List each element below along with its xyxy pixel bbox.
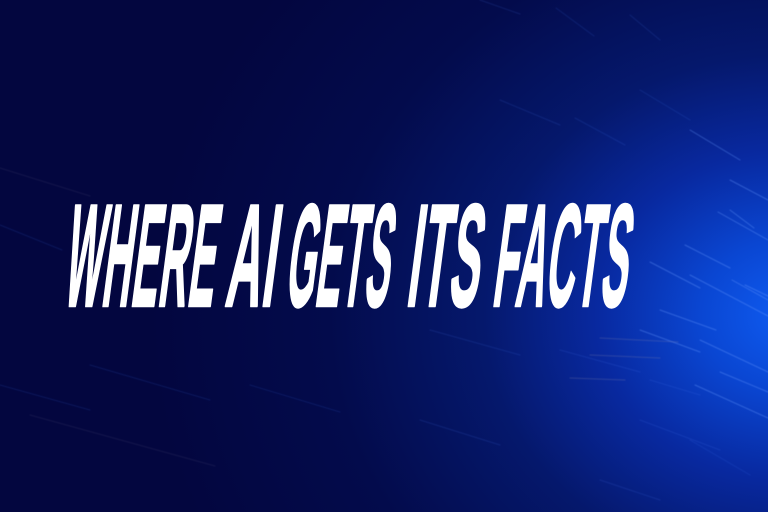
- title: WHERE: [58, 175, 230, 338]
- title: AI: [220, 175, 291, 338]
- title: ITS: [401, 175, 495, 338]
- title: GETS: [280, 175, 405, 338]
